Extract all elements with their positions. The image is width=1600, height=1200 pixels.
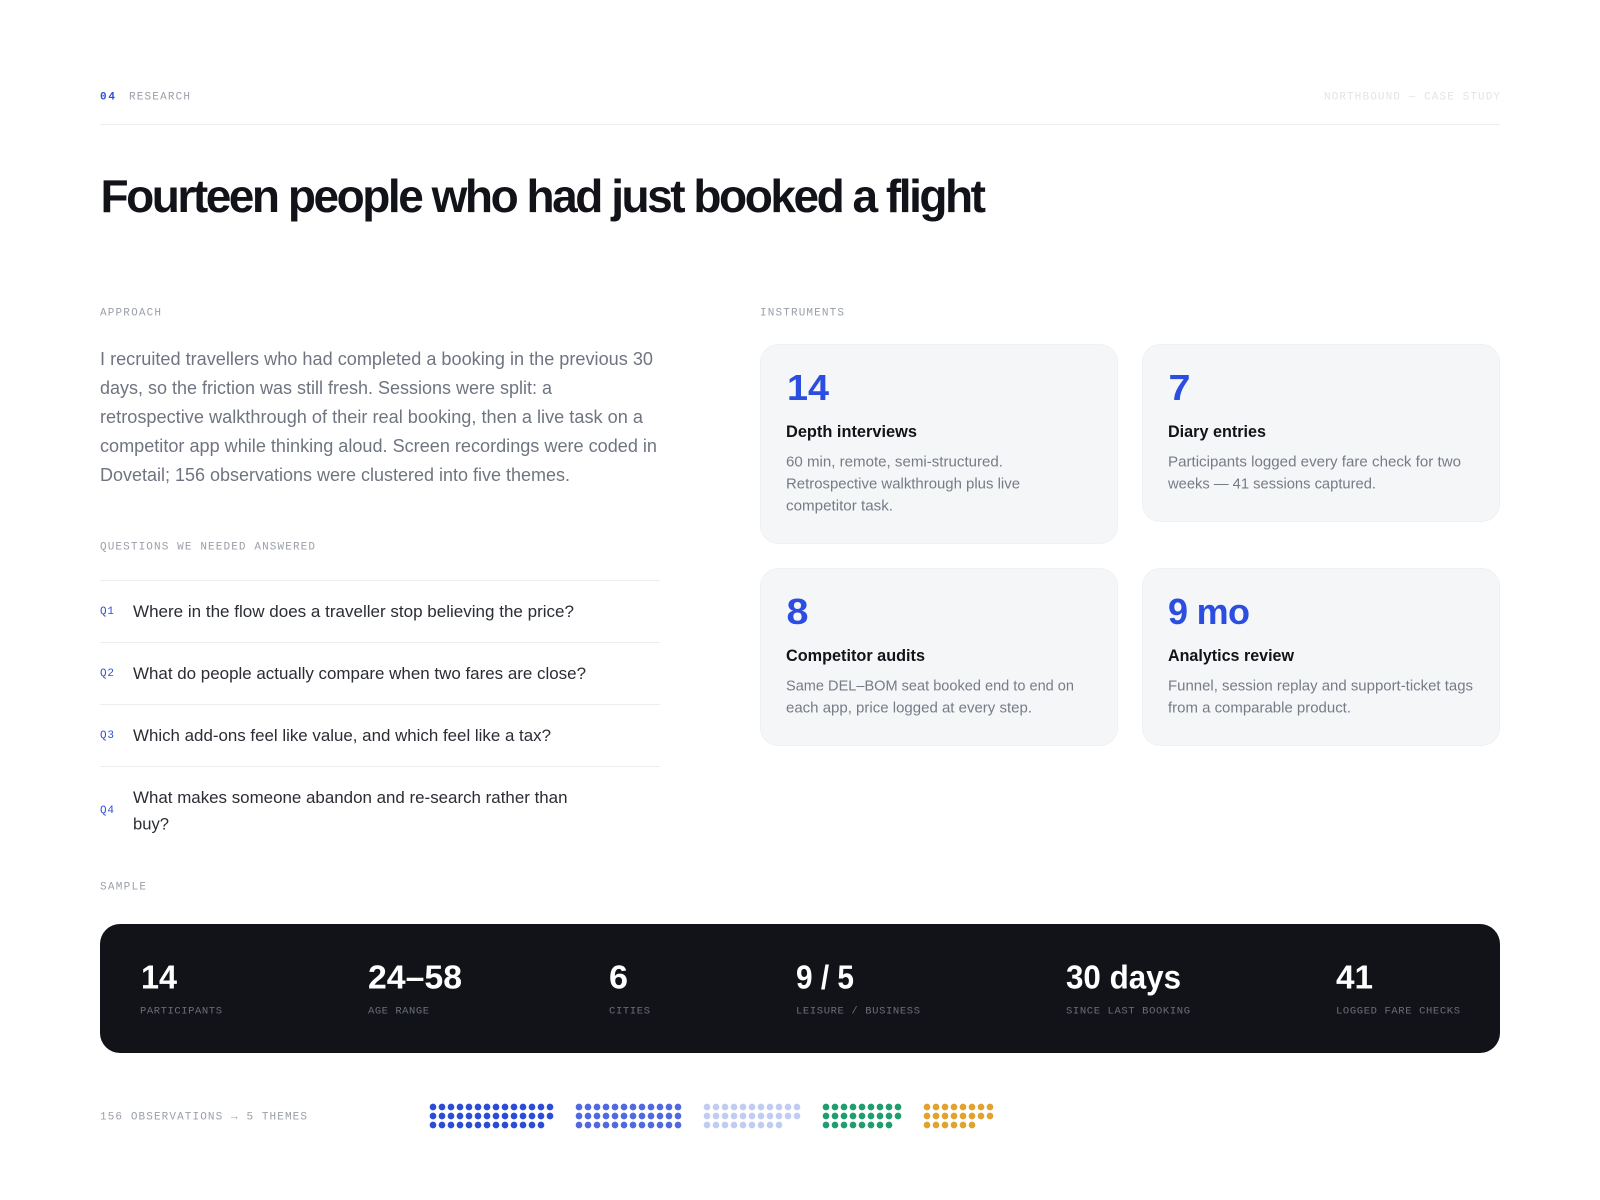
card: diary entries: Diary entries bbox=[1168, 423, 1266, 441]
card: diary entries: 7 bbox=[1168, 367, 1190, 408]
stat: logged fare checks: 41 bbox=[1336, 958, 1373, 996]
question 1: Q1 bbox=[100, 606, 114, 618]
card: diary entries bbox=[1142, 344, 1500, 522]
card: analytics review bbox=[1142, 568, 1500, 746]
questions heading: QUESTIONS WE NEEDED ANSWERED bbox=[100, 542, 315, 554]
card: competitor audits: Competitor audits bbox=[786, 647, 925, 665]
question 3: Q3 bbox=[100, 730, 114, 742]
stat: logged fare checks: LOGGED FARE CHECKS bbox=[1336, 1006, 1460, 1018]
stat: leisure / business: 9 / 5 bbox=[796, 958, 854, 996]
theme 4 dots bbox=[826, 1107, 898, 1125]
stat: leisure / business bbox=[796, 958, 920, 1018]
card: competitor audits: Same DEL–BOM seat booked end to end on bbox=[786, 678, 1074, 694]
stat: since last booking: 30 days bbox=[1066, 958, 1181, 996]
theme 5 dots bbox=[927, 1107, 990, 1125]
theme 2 dots bbox=[579, 1107, 678, 1125]
approach heading: APPROACH bbox=[100, 308, 161, 320]
section number: 04 bbox=[100, 92, 115, 104]
panel: instruments bbox=[760, 308, 1500, 746]
stat: leisure / business: LEISURE / BUSINESS bbox=[796, 1006, 920, 1018]
stat: cities: CITIES bbox=[609, 1006, 650, 1018]
sample heading: SAMPLE bbox=[100, 882, 146, 894]
instruments heading: INSTRUMENTS bbox=[760, 308, 844, 320]
card: depth interviews: 14 bbox=[787, 367, 829, 408]
question 3: Which add-ons feel like value, and which feel like a tax? bbox=[133, 727, 551, 745]
stat: participants bbox=[140, 958, 222, 1018]
title: Fourteen people who had just booked a flight bbox=[100, 170, 986, 222]
card: diary entries: weeks — 41 sessions captured. bbox=[1167, 476, 1376, 492]
stat: age range: AGE RANGE bbox=[368, 1006, 429, 1018]
panel: sample stats band bbox=[100, 924, 1500, 1053]
project label: NORTHBOUND — CASE STUDY bbox=[1324, 92, 1500, 104]
header bar bbox=[100, 92, 1500, 124]
card: competitor audits bbox=[760, 568, 1118, 746]
card: analytics review: Funnel, session replay and support-ticket tags bbox=[1168, 678, 1473, 694]
question 1: Where in the flow does a traveller stop believing the price? bbox=[133, 603, 574, 621]
approach paragraph: I recruited travellers who had completed a booking in the previous 30 bbox=[100, 349, 653, 369]
approach paragraph: retrospective walkthrough of their real booking, then a live task on a bbox=[100, 407, 644, 427]
card: analytics review: Analytics review bbox=[1168, 647, 1294, 665]
stat: age range: 24–58 bbox=[368, 958, 462, 996]
stat: since last booking bbox=[1066, 958, 1190, 1018]
stat: since last booking: SINCE LAST BOOKING bbox=[1066, 1006, 1190, 1018]
section name: RESEARCH bbox=[129, 92, 190, 104]
card: depth interviews: competitor task. bbox=[786, 498, 893, 514]
theme 3 dots bbox=[707, 1107, 797, 1125]
question 4: buy? bbox=[133, 816, 169, 834]
panel: questions bbox=[100, 542, 660, 834]
question 2: What do people actually compare when two fares are close? bbox=[133, 665, 586, 683]
card: depth interviews: 60 min, remote, semi-structured. bbox=[786, 454, 1003, 470]
stat: cities bbox=[609, 958, 650, 1018]
card: depth interviews: Depth interviews bbox=[786, 423, 917, 441]
card: analytics review: 9 mo bbox=[1168, 591, 1250, 632]
approach paragraph: days, so the friction was still fresh. Sessions were split: a bbox=[100, 378, 553, 398]
card: depth interviews: Retrospective walkthrough plus live bbox=[786, 476, 1020, 492]
stat: logged fare checks bbox=[1336, 958, 1460, 1018]
question 4: Q4 bbox=[100, 805, 114, 817]
card: analytics review: from a comparable product. bbox=[1168, 700, 1351, 716]
observations label: 156 OBSERVATIONS → 5 THEMES bbox=[100, 1112, 307, 1124]
stat: age range bbox=[368, 958, 462, 1018]
card: diary entries: Participants logged every fare check for two bbox=[1168, 454, 1461, 470]
stat: participants: 14 bbox=[141, 958, 178, 996]
stat: participants: PARTICIPANTS bbox=[140, 1006, 222, 1018]
card: competitor audits: each app, price logged at every step. bbox=[786, 700, 1032, 716]
dot chart: 156 observations in 5 themes bbox=[433, 1107, 990, 1125]
question 4 bbox=[100, 789, 568, 834]
theme 1 dots bbox=[433, 1107, 550, 1125]
approach paragraph bbox=[100, 349, 657, 485]
stat: cities: 6 bbox=[609, 958, 628, 996]
panel: approach bbox=[100, 308, 657, 485]
approach paragraph: Dovetail; 156 observations were clustered into five themes. bbox=[100, 465, 570, 485]
question 4: What makes someone abandon and re-search rather than bbox=[133, 789, 568, 807]
card: depth interviews bbox=[760, 344, 1118, 544]
question 2: Q2 bbox=[100, 668, 114, 680]
card: competitor audits: 8 bbox=[786, 591, 808, 632]
approach paragraph: competitor app while thinking aloud. Screen recordings were coded in bbox=[100, 436, 657, 456]
